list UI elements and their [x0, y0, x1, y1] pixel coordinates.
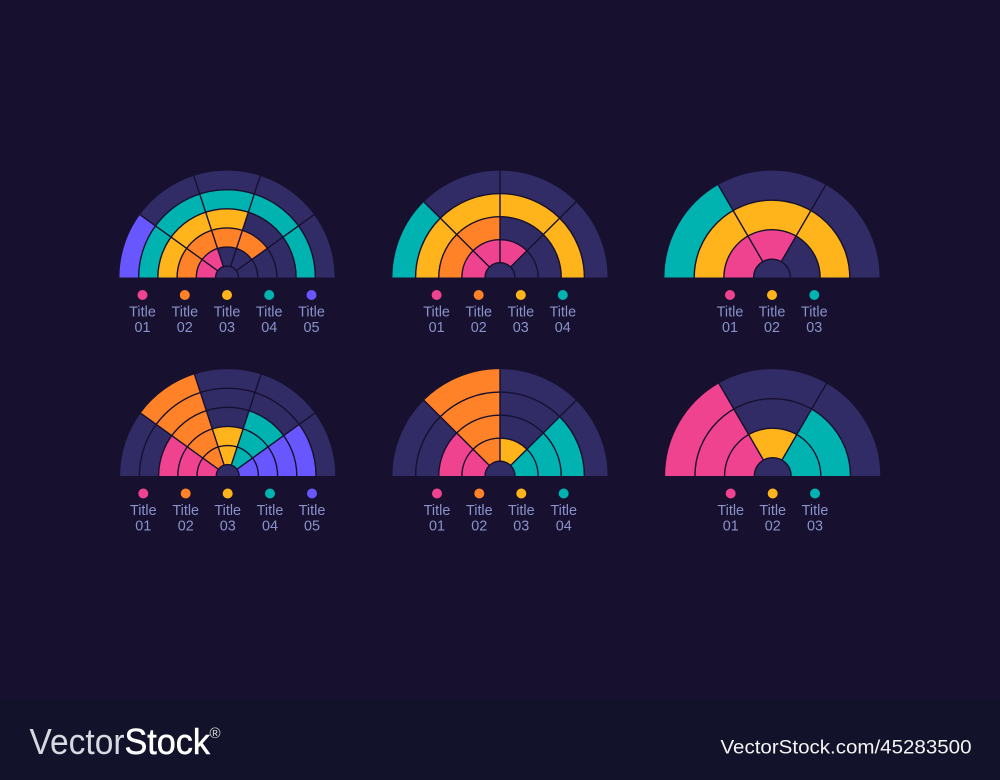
sector 5: [241, 220, 340, 314]
rings and sectors: [129, 167, 340, 314]
legend item 02: [171, 290, 198, 336]
legend item 02: 02: [764, 320, 780, 336]
legend: [424, 488, 577, 535]
legend item 03: Title: [507, 305, 534, 321]
legend: [423, 290, 576, 336]
legend item 03: Title: [801, 305, 828, 321]
sector 1: [129, 220, 210, 278]
legend item 03: [214, 488, 241, 535]
legend item 01: 01: [134, 320, 151, 336]
legend item 05: Title: [298, 305, 325, 321]
legend item 04: 04: [556, 519, 572, 535]
legend item 04: 04: [555, 320, 571, 336]
legend item 03: Title: [508, 503, 535, 519]
legend item 02: 02: [471, 320, 487, 336]
legend item 01: [130, 488, 157, 535]
legend item 02: [466, 488, 493, 535]
legend: [129, 290, 325, 336]
sector 2: [432, 361, 535, 463]
legend item 03: 03: [219, 320, 235, 336]
chart 5: four-sector semicircle, bottom centre: [404, 361, 616, 535]
legend item 02: [759, 290, 785, 336]
legend item 03: Title: [214, 503, 241, 519]
legend item 03: 03: [513, 519, 529, 535]
legend: [130, 488, 325, 535]
chart 1: five-sector semicircle, top left: [129, 167, 340, 336]
rings and sectors: [130, 366, 341, 512]
sector 4: [233, 384, 313, 478]
chart 3: three-sector semicircle, top right: [679, 158, 888, 336]
sector 1: [404, 210, 481, 278]
legend item 05: Title: [299, 503, 325, 519]
hub: [485, 461, 515, 476]
chart 6: three-sector semicircle, bottom right: [680, 357, 888, 535]
legend item 01: Title: [130, 503, 157, 519]
legend item 03: Title: [214, 305, 240, 321]
legend item 01: Title: [423, 305, 450, 321]
chart 2: four-sector semicircle, top centre: [404, 163, 616, 336]
sector 2: [148, 174, 247, 268]
registered mark: ®: [210, 725, 221, 742]
legend item 04: Title: [256, 305, 283, 321]
legend item 04: 04: [262, 519, 278, 535]
legend item 03: [508, 488, 535, 535]
legend item 03: Title: [802, 503, 828, 519]
sector 1: [404, 409, 481, 476]
rings and sectors: [404, 163, 616, 312]
legend item 03: [801, 290, 828, 336]
legend: [717, 488, 828, 535]
rings and sectors: [680, 357, 888, 502]
ring and spoke dividers: [139, 176, 315, 278]
legend item 02: [172, 488, 199, 535]
ring and spoke dividers: [139, 374, 316, 476]
footer logo: Vector: Vector: [30, 721, 125, 762]
footer image id: VectorStock.com/45283500: [720, 736, 972, 758]
legend item 04: Title: [257, 503, 283, 519]
ring and spoke dividers: [416, 171, 584, 278]
legend item 01: Title: [717, 503, 744, 519]
sector 2: [726, 158, 833, 263]
legend item 04: Title: [549, 305, 576, 321]
legend item 01: 01: [723, 519, 739, 535]
hub: [754, 259, 790, 278]
sector 3: [781, 396, 888, 502]
legend item 01: Title: [717, 305, 743, 321]
legend item 04: [257, 488, 283, 535]
legend item 02: Title: [465, 305, 492, 321]
legend item 02: Title: [172, 503, 199, 519]
legend item 02: 02: [471, 519, 487, 535]
legend item 02: 02: [765, 519, 781, 535]
legend item 01: 01: [429, 519, 445, 535]
legend item 04: Title: [550, 503, 577, 519]
legend item 04: [549, 290, 576, 336]
legend item 01: [717, 488, 744, 535]
hub: [754, 458, 791, 476]
sector 2: [149, 373, 248, 466]
ring and spoke dividers: [694, 185, 850, 278]
footer logo: Stock: Stock: [124, 721, 211, 762]
sector 3: [780, 198, 888, 303]
ring and spoke dividers: [695, 383, 850, 476]
legend item 01: Title: [424, 503, 450, 519]
sector 1: [680, 396, 756, 476]
legend item 03: [507, 290, 534, 336]
legend item 03: [214, 290, 240, 336]
hub: [216, 266, 238, 278]
sector 2: [726, 357, 834, 462]
sector 3: [198, 366, 277, 460]
sector 1: [679, 198, 755, 278]
rings and sectors: [679, 158, 888, 303]
sector 3: [500, 182, 568, 259]
legend item 02: Title: [466, 503, 493, 519]
legend item 02: Title: [759, 305, 785, 321]
sector 4: [232, 185, 312, 279]
legend item 01: [717, 290, 743, 336]
chart 4: five-sector semicircle, bottom left: [130, 366, 341, 535]
legend item 02: [759, 488, 786, 535]
sector 3: [500, 381, 568, 457]
legend item 04: 04: [261, 320, 277, 336]
hub: [216, 464, 239, 476]
legend item 04: [256, 290, 283, 336]
sector 4: [513, 210, 616, 312]
legend item 04: [550, 488, 577, 535]
sector 4: [513, 409, 616, 510]
legend item 03: 03: [513, 320, 529, 336]
legend item 03: [802, 488, 828, 535]
legend item 02: [465, 290, 492, 336]
legend item 03: 03: [806, 320, 822, 336]
legend item 01: 01: [135, 519, 151, 535]
legend item 02: 02: [178, 519, 194, 535]
legend item 05: 05: [304, 519, 320, 535]
sector 3: [197, 167, 276, 261]
sector 2: [432, 163, 535, 264]
sector 5: [241, 419, 341, 512]
legend item 01: [129, 290, 156, 336]
legend item 01: 01: [722, 320, 738, 336]
legend item 05: [299, 488, 325, 535]
ring and spoke dividers: [416, 369, 584, 476]
legend item 05: [298, 290, 325, 336]
legend item 03: 03: [807, 519, 823, 535]
legend item 01: Title: [129, 305, 156, 321]
hub: [485, 262, 515, 278]
legend item 02: Title: [759, 503, 786, 519]
rings and sectors: [404, 361, 616, 510]
footer bar: [0, 700, 1000, 780]
legend item 01: 01: [429, 320, 445, 336]
legend item 01: [424, 488, 450, 535]
legend: [717, 290, 828, 336]
legend item 01: [423, 290, 450, 336]
legend item 02: Title: [171, 305, 198, 321]
legend item 03: 03: [220, 519, 236, 535]
legend item 02: 02: [177, 320, 193, 336]
legend item 05: 05: [303, 320, 320, 336]
sector 1: [130, 419, 211, 476]
